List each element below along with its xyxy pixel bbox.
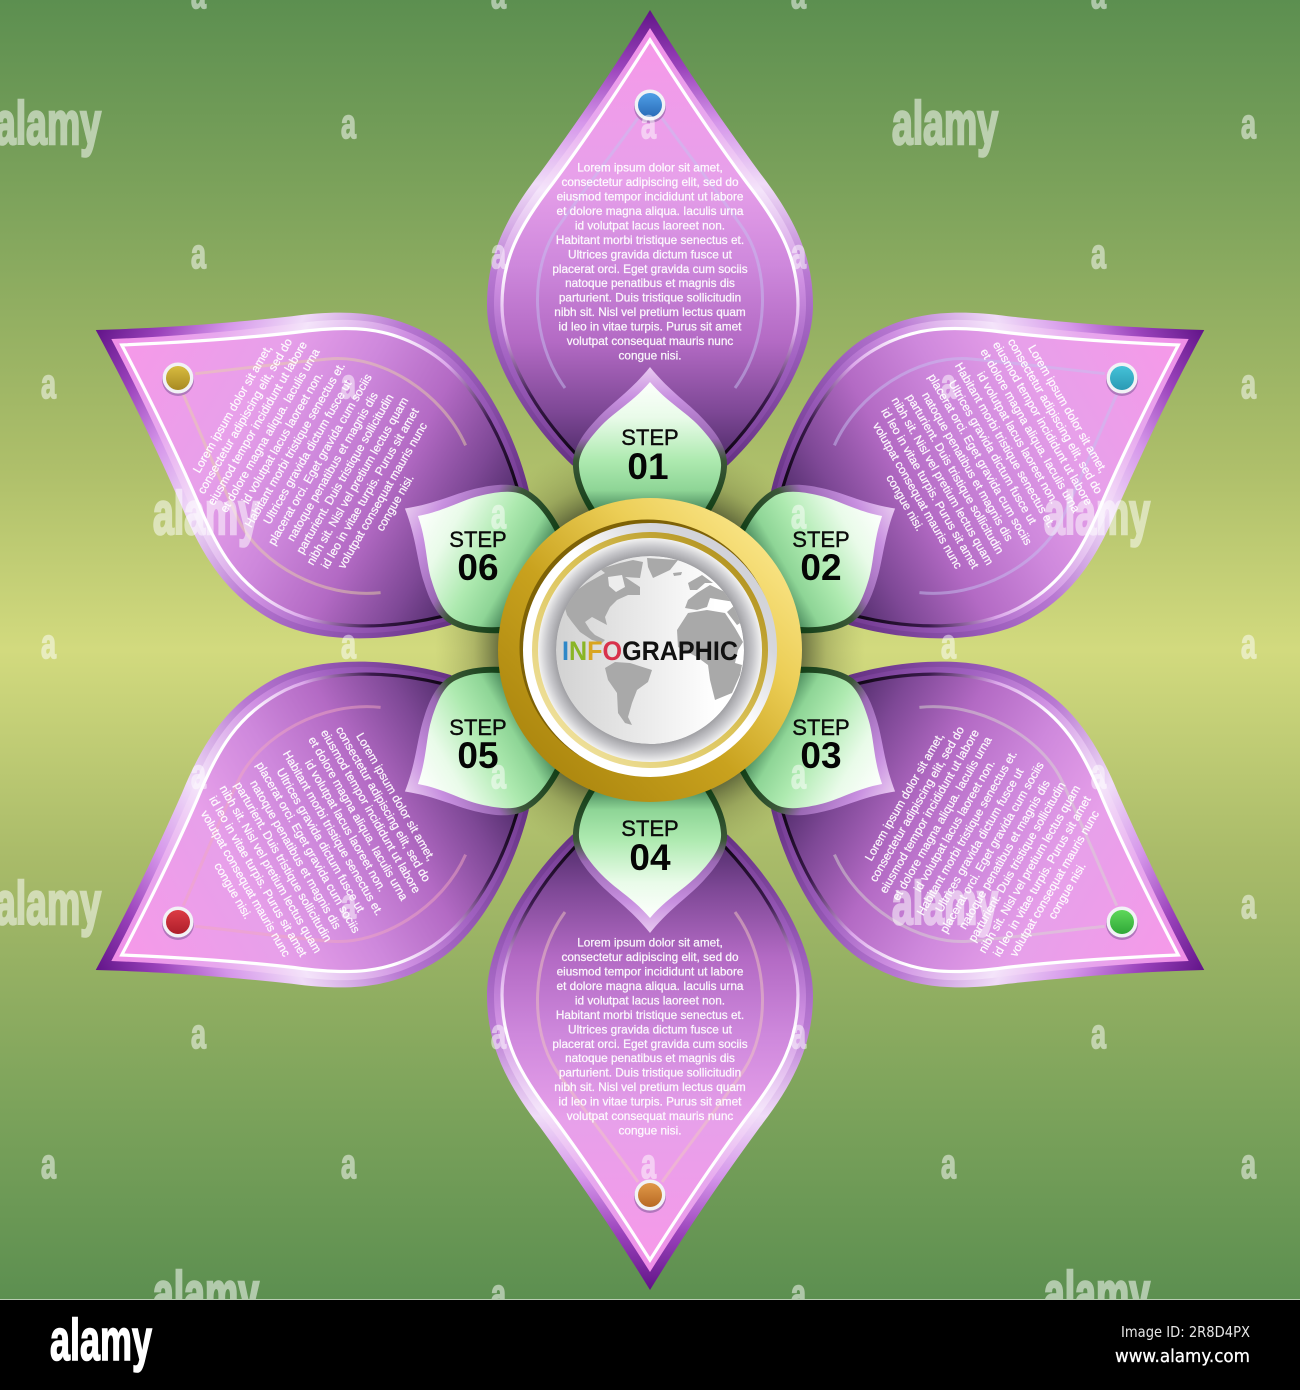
petal 2: upper right: nibh sit. Nisl vel pretium lectus quam — [889, 395, 997, 568]
petal 4: bottom: congue nisi. — [619, 1123, 681, 1137]
petal 6: upper left: id volutpat lacus laoreet non. — [239, 369, 326, 506]
alamy watermarks: a — [341, 100, 356, 147]
alamy watermarks: a — [1091, 1010, 1106, 1057]
petal 4: bottom: et dolore magna aliqua. Iaculis urna — [557, 979, 744, 993]
petal 3: lower right: Habitant morbi tristique senectus et. — [914, 748, 1020, 918]
petal 4: bottom: id volutpat lacus laoreet non. — [575, 993, 725, 1007]
petal 4: bottom: Habitant morbi tristique senectus et. — [556, 1008, 744, 1022]
alamy watermarks: a — [791, 750, 806, 797]
petal 5: lower left: parturient. Duis tristique sollicitudin — [231, 779, 335, 944]
alamy watermarks: a — [791, 1010, 806, 1057]
petal 1: top: nibh sit. Nisl vel pretium lectus quam — [554, 305, 746, 319]
petal 1: top — [487, 10, 813, 510]
step 03 badge — [724, 648, 934, 858]
petal 1: top: eiusmod tempor incididunt ut labore — [557, 190, 744, 204]
petal 5: lower left: volutpat consequat mauris nunc — [198, 808, 293, 959]
petal 5: lower left: id leo in vitae turpis. Purus sit amet — [206, 794, 310, 960]
step 02 badge: STEP — [792, 527, 850, 552]
step 06 badge: STEP — [449, 527, 507, 552]
central gold ring with globe — [498, 498, 802, 802]
infographic title: INFOGRAPHIC — [562, 636, 738, 666]
petal 1: top: volutpat consequat mauris nunc — [567, 334, 733, 348]
petal 2: upper right: Ultrices gravida dictum fusce ut — [946, 378, 1040, 527]
petal 5: lower left: natoque penatibus et magnis dis — [247, 778, 344, 932]
petal 3: lower right: parturient. Duis tristique sollicitudin — [965, 779, 1069, 944]
petal 5: lower left: nibh sit. Nisl vel pretium lectus quam — [217, 783, 325, 956]
step 03 badge: 03 — [800, 735, 842, 776]
petal 5: lower left: Ultrices gravida dictum fusce ut — [274, 766, 368, 915]
alamy watermarks: a — [941, 620, 956, 667]
alamy watermarks: a — [341, 880, 356, 927]
petal 4: bottom: parturient. Duis tristique sollicitudin — [559, 1066, 741, 1080]
petal 3: lower right: congue nisi. — [1045, 860, 1089, 921]
petal 3: lower right: volutpat consequat mauris nunc — [1007, 808, 1102, 959]
globe — [556, 556, 744, 744]
alamy watermarks: a — [1241, 360, 1256, 407]
alamy watermarks: a — [41, 360, 56, 407]
petal 6: upper left: natoque penatibus et magnis dis — [284, 389, 381, 544]
petal 6: upper left: id leo in vitae turpis. Purus sit amet — [318, 405, 422, 571]
petal 5: lower left: congue nisi. — [211, 860, 255, 921]
alamy watermarks: a — [41, 620, 56, 667]
alamy watermarks: a — [491, 230, 506, 277]
alamy watermarks: a — [491, 1010, 506, 1057]
petal 1: top: parturient. Duis tristique sollicitudin — [559, 291, 741, 305]
petal 2: upper right: parturient. Duis tristique sollicitudin — [903, 391, 1007, 556]
alamy watermarks: a — [1091, 230, 1106, 277]
petal 2: upper right: Lorem ipsum dolor sit amet, — [1025, 342, 1110, 475]
petal 3: lower right: Lorem ipsum dolor sit amet, — [862, 730, 947, 863]
alamy watermarks: alamy — [153, 1260, 259, 1327]
step 04 badge — [573, 780, 727, 933]
step 03 badge: STEP — [792, 715, 850, 740]
petal 1: top: congue nisi. — [619, 348, 681, 362]
step 05 badge — [366, 648, 576, 858]
alamy watermarks: a — [341, 1140, 356, 1187]
petal 4: bottom: volutpat consequat mauris nunc — [567, 1109, 733, 1123]
petal 6: upper left: Lorem ipsum dolor sit amet, — [190, 342, 275, 475]
petal 5: lower left: Habitant morbi tristique senectus et. — [280, 748, 386, 918]
petal 4: bottom: consectetur adipiscing elit, sed do — [561, 950, 739, 964]
petal 2: upper right: eiusmod tempor incididunt ut labore — [990, 339, 1096, 508]
alamy watermarks: a — [1241, 100, 1256, 147]
step 05 badge: 05 — [457, 735, 499, 776]
petal 5: lower left: id volutpat lacus laoreet non. — [302, 757, 389, 894]
petal 2: upper right: id leo in vitae turpis. Purus sit amet — [878, 406, 982, 572]
petal 6: upper left: congue nisi. — [373, 472, 417, 533]
alamy watermarks: a — [1241, 620, 1256, 667]
petal 4: bottom: Ultrices gravida dictum fusce ut — [568, 1022, 733, 1036]
petal 1: top: Ultrices gravida dictum fusce ut — [568, 247, 733, 261]
petal 4: bottom: Lorem ipsum dolor sit amet, — [577, 936, 723, 950]
footer bar — [0, 1299, 1300, 1390]
step 04 badge: 04 — [629, 837, 671, 878]
petal 1: top: id volutpat lacus laoreet non. — [575, 218, 725, 232]
petal 6: upper left: consectetur adipiscing elit, sed do — [194, 335, 295, 496]
petal 3: lower right — [690, 579, 1286, 1111]
alamy watermarks: alamy — [892, 90, 998, 157]
petal 4: bottom — [487, 790, 813, 1290]
alamy watermarks: a — [341, 360, 356, 407]
petal 4: bottom: placerat orci. Eget gravida cum sociis — [552, 1037, 748, 1051]
petal 6: upper left: Ultrices gravida dictum fusce ut — [260, 377, 355, 527]
alamy watermarks: a — [491, 1270, 506, 1317]
petal 5: lower left: et dolore magna aliqua. Iaculis urna — [305, 734, 411, 903]
step 04 badge: STEP — [621, 816, 679, 841]
petal 6: upper left: Habitant morbi tristique senectus et. — [242, 360, 348, 530]
alamy watermarks: alamy — [892, 870, 998, 937]
petal 6: upper left: volutpat consequat mauris nunc — [335, 420, 430, 571]
petal 5: lower left — [14, 579, 610, 1111]
petal 3: lower right: consectetur adipiscing elit, sed do — [866, 723, 967, 884]
petal 4: bottom: eiusmod tempor incididunt ut labore — [557, 964, 744, 978]
footer bar: Image ID: 2R8D4PX — [1121, 1323, 1250, 1341]
alamy watermarks: a — [191, 1010, 206, 1057]
alamy watermarks: a — [191, 750, 206, 797]
petal 5: lower left: eiusmod tempor incididunt ut labore — [318, 727, 424, 896]
step 01 badge — [573, 367, 727, 520]
alamy watermarks: a — [1241, 880, 1256, 927]
petal 6: upper left: placerat orci. Eget gravida cum sociis — [265, 371, 375, 547]
petal 1: top: et dolore magna aliqua. Iaculis urna — [557, 204, 744, 218]
petal 2: upper right: et dolore magna aliqua. Iaculis urna — [977, 346, 1083, 515]
alamy watermarks: alamy — [153, 480, 259, 547]
petal 1: top: Habitant morbi tristique senectus et. — [556, 233, 744, 247]
petal 6: upper left: parturient. Duis tristique sollicitudin — [293, 391, 397, 556]
alamy watermarks: a — [641, 1140, 656, 1187]
petal 5: lower left: consectetur adipiscing elit, sed do — [333, 724, 434, 885]
alamy watermarks: a — [341, 620, 356, 667]
alamy watermarks: a — [791, 1270, 806, 1317]
step 05 badge: STEP — [449, 715, 507, 740]
alamy watermarks: a — [941, 1140, 956, 1187]
petal 3: lower right: eiusmod tempor incididunt ut labore — [876, 726, 982, 896]
petal 3: lower right: Ultrices gravida dictum fusce ut — [932, 765, 1027, 915]
alamy watermarks: a — [791, 490, 806, 537]
petal 2: upper right: id volutpat lacus laoreet non. — [974, 369, 1061, 506]
step 06 badge: 06 — [457, 547, 499, 588]
alamy watermarks: a — [641, 100, 656, 147]
petal 1: top: natoque penatibus et magnis dis — [565, 276, 735, 290]
alamy watermarks: alamy — [0, 870, 101, 937]
petal 2: upper right: consectetur adipiscing elit, sed do — [1005, 336, 1106, 497]
petal 1: top: id leo in vitae turpis. Purus sit amet — [559, 320, 742, 334]
footer bar: www.alamy.com — [1115, 1346, 1250, 1367]
petal 4: bottom: natoque penatibus et magnis dis — [565, 1051, 735, 1065]
step 02 badge — [724, 442, 934, 652]
petal 6: upper left: nibh sit. Nisl vel pretium lectus quam — [303, 395, 411, 567]
petal 1: top: Lorem ipsum dolor sit amet, — [577, 161, 723, 175]
petal 2: upper right — [690, 189, 1286, 721]
footer bar: alamy — [50, 1308, 152, 1373]
step 02 badge: 02 — [800, 547, 842, 588]
petal 3: lower right: natoque penatibus et magnis dis — [956, 777, 1053, 932]
petal 3: lower right: et dolore magna aliqua. Iaculis urna — [889, 734, 995, 903]
petal 3: lower right: id leo in vitae turpis. Purus sit amet — [990, 793, 1094, 959]
alamy watermarks: alamy — [1044, 480, 1150, 547]
petal 2: upper right: Habitant morbi tristique senectus et. — [952, 360, 1058, 530]
petal 5: lower left: Lorem ipsum dolor sit amet, — [353, 730, 438, 863]
alamy watermarks: alamy — [1044, 1260, 1150, 1327]
alamy watermarks: a — [791, 230, 806, 277]
petal 3: lower right: id volutpat lacus laoreet non. — [911, 757, 998, 894]
petal 1: top: placerat orci. Eget gravida cum sociis — [552, 262, 748, 276]
alamy watermarks: alamy — [0, 90, 101, 157]
petal 6: upper left: et dolore magna aliqua. Iaculis urna — [217, 346, 323, 515]
petal 6: upper left — [14, 189, 610, 721]
alamy watermarks: a — [491, 750, 506, 797]
alamy watermarks: a — [491, 490, 506, 537]
petal 2: upper right: natoque penatibus et magnis dis — [919, 390, 1016, 544]
hub shadow behind flower — [435, 435, 865, 865]
petal 4: bottom: nibh sit. Nisl vel pretium lectus quam — [554, 1080, 746, 1094]
petal 3: lower right: nibh sit. Nisl vel pretium lectus quam — [975, 783, 1083, 955]
petal 2: upper right: volutpat consequat mauris nunc — [870, 420, 965, 571]
alamy watermarks: a — [1091, 750, 1106, 797]
alamy watermarks: a — [1241, 1140, 1256, 1187]
step 06 badge — [366, 442, 576, 652]
petal 1: top: consectetur adipiscing elit, sed do — [561, 175, 739, 189]
petal 3: lower right: placerat orci. Eget gravida cum sociis — [937, 759, 1047, 935]
alamy watermarks: a — [191, 230, 206, 277]
petal 5: lower left: placerat orci. Eget gravida cum sociis — [253, 759, 363, 936]
petal 6: upper left: eiusmod tempor incididunt ut labore — [204, 338, 310, 508]
petal 4: bottom: id leo in vitae turpis. Purus sit amet — [559, 1095, 742, 1109]
alamy watermarks: a — [41, 1140, 56, 1187]
step 01 badge: 01 — [627, 446, 669, 487]
alamy watermarks: a — [941, 360, 956, 407]
step 01 badge: STEP — [621, 425, 679, 450]
petal 2: upper right: placerat orci. Eget gravida cum sociis — [925, 371, 1035, 548]
petal 2: upper right: congue nisi. — [883, 472, 927, 533]
